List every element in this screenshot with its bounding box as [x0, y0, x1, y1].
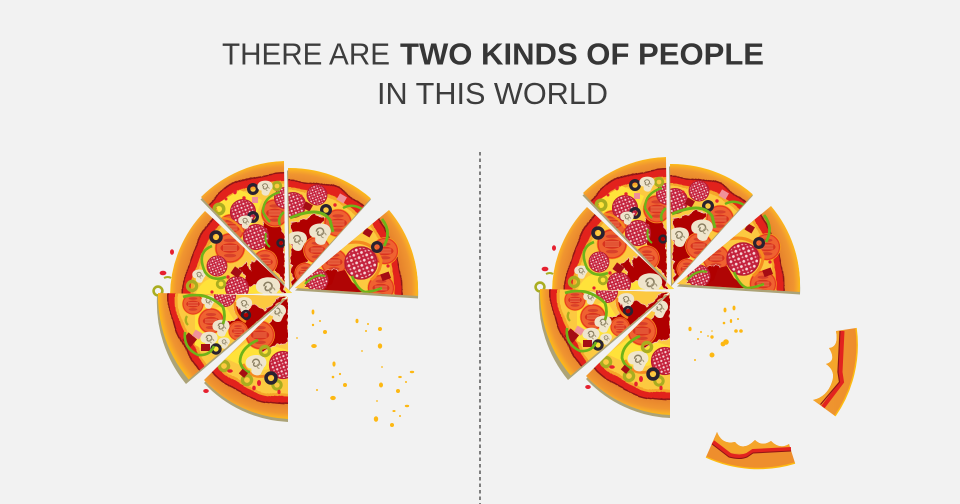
title	[222, 38, 764, 111]
slice: right	[295, 206, 800, 298]
dashed divider	[479, 152, 481, 504]
title: IN THIS WORLD	[377, 77, 608, 111]
infographic canvas	[152, 43, 858, 504]
right pizza with two bitten slices	[536, 157, 800, 421]
title: THERE ARE	[222, 38, 390, 72]
stray toppings around the pizza	[154, 249, 209, 393]
crumbs: left plate	[296, 310, 414, 427]
left pizza with two slices eaten	[154, 161, 418, 425]
slice: top right	[167, 168, 413, 414]
slice: top left	[162, 161, 408, 407]
crumbs: right plate	[688, 306, 743, 361]
slice: lower left	[156, 289, 669, 384]
slice: bottom	[166, 175, 410, 422]
bitten crust: right	[813, 328, 857, 416]
slice: left middle	[170, 207, 674, 294]
bitten crust: bottom	[706, 432, 795, 468]
title: TWO KINDS OF PEOPLE	[400, 38, 764, 72]
